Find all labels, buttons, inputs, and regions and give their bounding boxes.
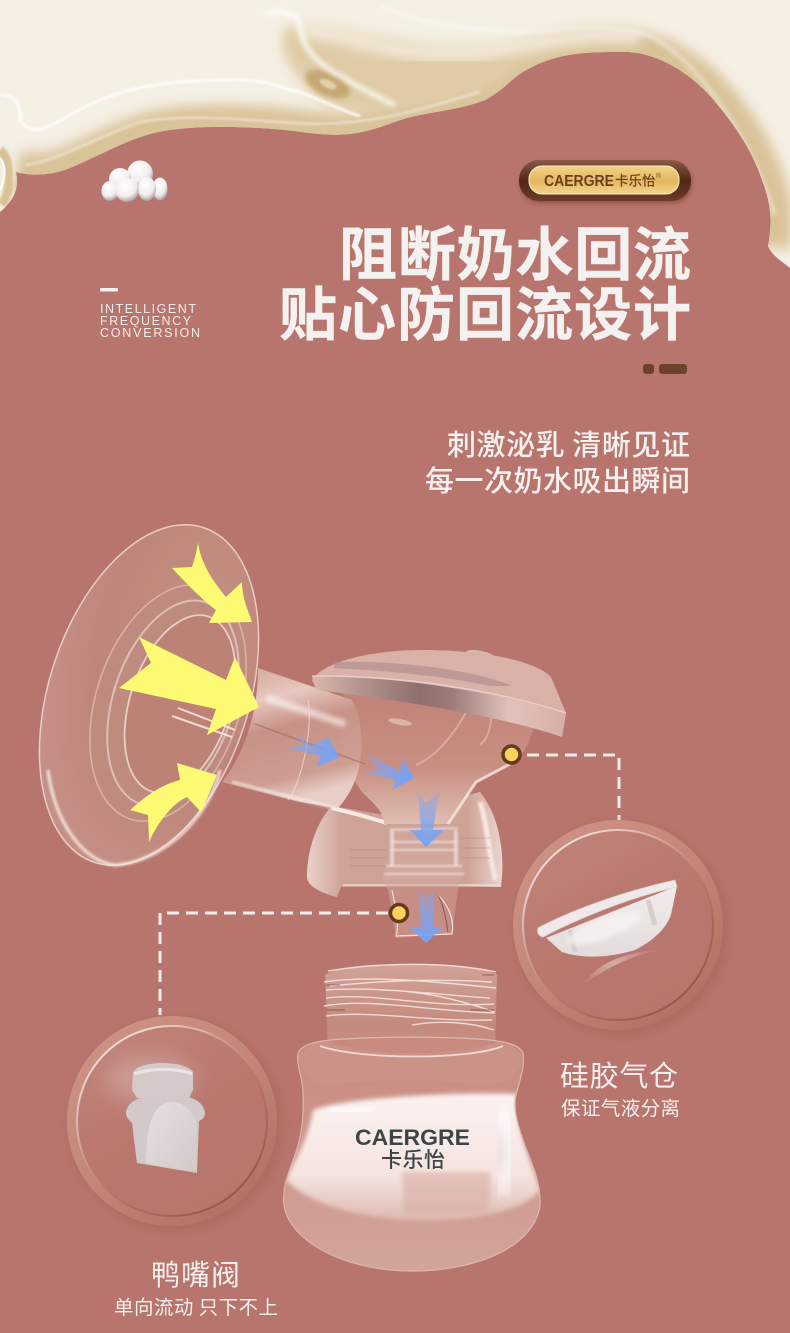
bottle logo: CAERGRE — [355, 1125, 470, 1150]
arrow: blue down 1 — [410, 792, 444, 847]
arrow: middle yellow — [119, 637, 259, 735]
chamber part — [538, 880, 677, 985]
blue flow arrows — [284, 732, 444, 943]
icon: cloud of spheres — [102, 160, 168, 202]
caption: silicone chamber — [560, 1053, 680, 1121]
decorative pills — [643, 364, 687, 374]
english tagline: CONVERSION — [100, 326, 200, 340]
subtitle: 每一次奶水吸出瞬间 — [425, 458, 690, 500]
subtitle: 刺激泌乳 清晰见证 — [447, 422, 690, 464]
milk bottle — [278, 964, 548, 1274]
detail circle: silicone chamber — [513, 820, 728, 1035]
brand badge: 卡乐怡 — [615, 170, 656, 190]
marker dot: valve — [390, 904, 408, 922]
bottle outline — [284, 1037, 540, 1271]
bottle body — [278, 1034, 548, 1274]
title: 贴心防回流设计 — [279, 268, 691, 352]
duckbill valve on pump — [382, 828, 466, 938]
brand badge — [519, 160, 692, 203]
arrow: lower yellow — [130, 763, 217, 842]
caption: silicone chamber: 硅胶气仓 — [560, 1053, 678, 1095]
valve part — [126, 1063, 205, 1173]
yellow arrows — [119, 542, 259, 842]
pump lid — [312, 650, 566, 737]
arrow: upper yellow — [172, 542, 252, 623]
title: 阻断奶水回流 — [339, 208, 691, 292]
english tagline: FREQUENCY — [100, 314, 192, 328]
subtitle — [425, 422, 690, 500]
marker dot: lid — [503, 746, 520, 763]
bowl and funnel — [341, 685, 540, 824]
arrow: blue tube 2 — [360, 753, 414, 790]
pump skirt collar — [307, 792, 502, 897]
title — [279, 208, 691, 352]
caption: duckbill valve: 鸭嘴阀 — [151, 1252, 240, 1294]
flowing milk banner — [0, 0, 790, 270]
english tagline — [100, 288, 200, 340]
bottle logo: 卡乐怡 — [381, 1144, 445, 1174]
arrow: blue tube 1 — [284, 732, 339, 767]
caption detail: 单向流动 只下不上 — [114, 1291, 278, 1320]
flange — [0, 497, 298, 893]
feeding tube — [222, 668, 365, 808]
breast pump — [0, 497, 566, 943]
bottle neck — [324, 964, 497, 1052]
arrow: blue down 2 — [410, 890, 442, 943]
english tagline: INTELLIGENT — [100, 302, 196, 316]
brand badge: ® — [656, 172, 662, 180]
bottle logo — [355, 1125, 470, 1174]
caption detail: 保证气液分离 — [561, 1092, 680, 1121]
caption: duckbill valve — [114, 1252, 278, 1320]
detail circle: duckbill valve — [67, 1016, 282, 1231]
dashed connectors — [160, 755, 619, 1015]
badge text: CAERGRE — [544, 173, 614, 190]
